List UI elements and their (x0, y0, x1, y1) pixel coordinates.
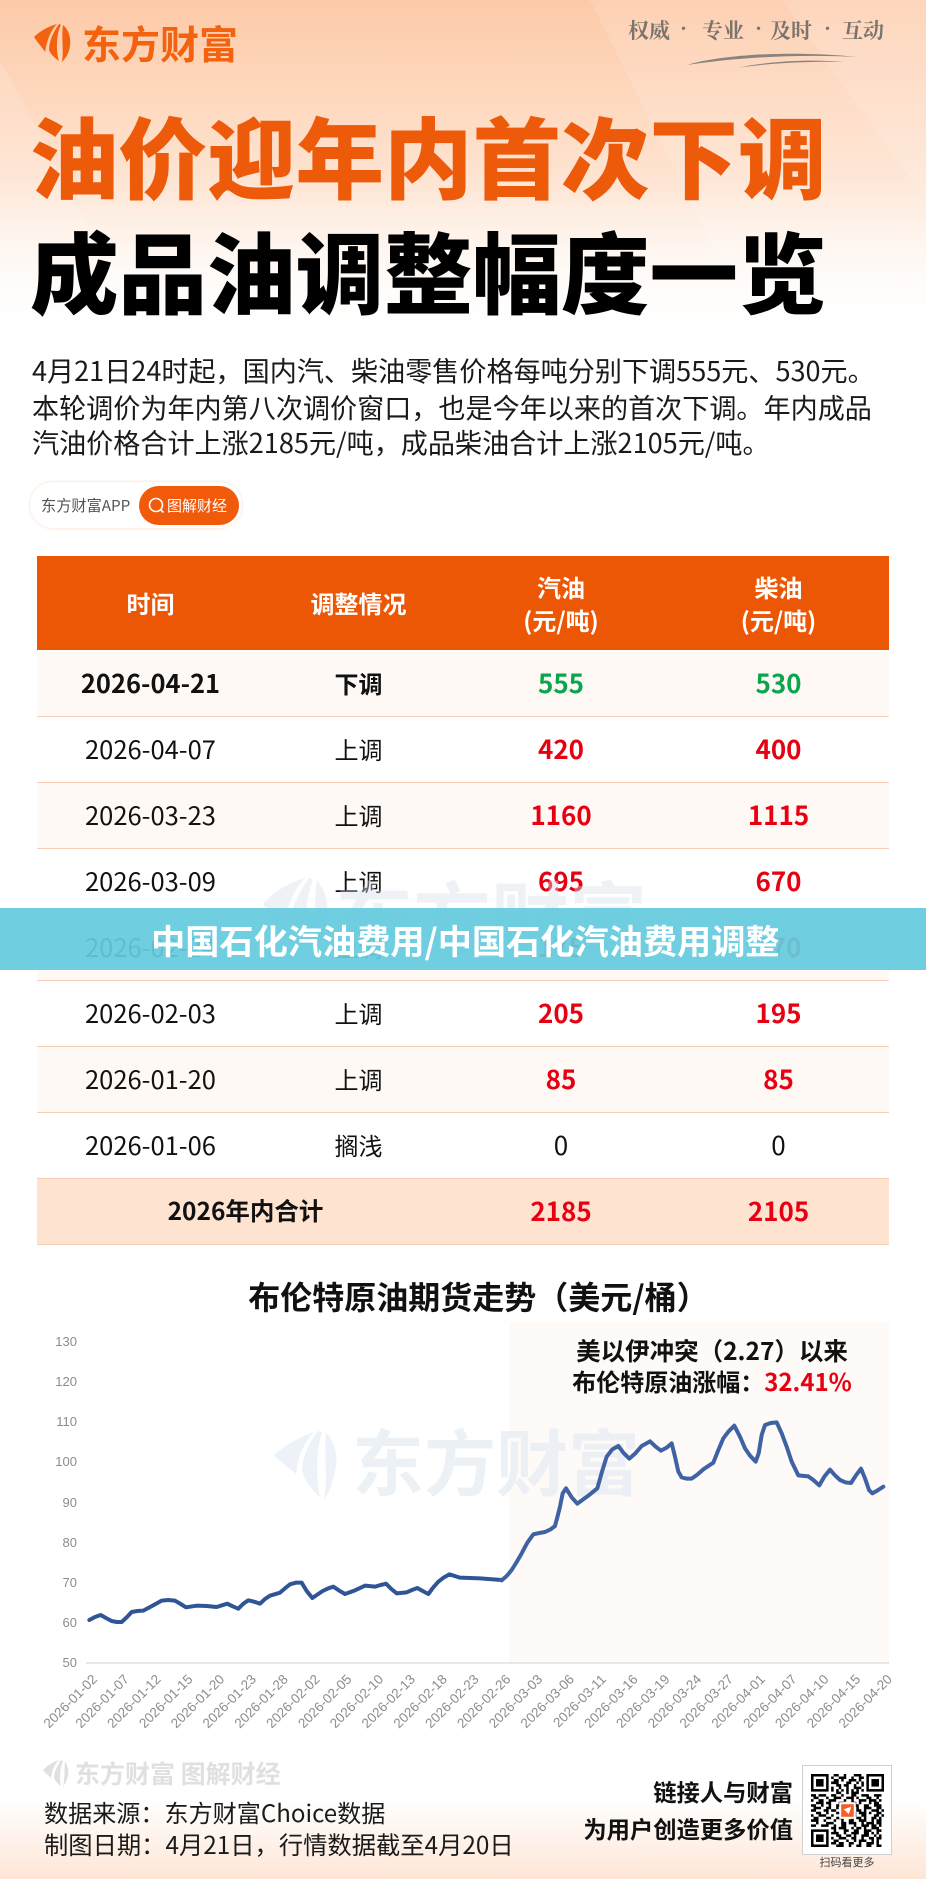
row 2026-03-09: 2026-03-09 (85, 862, 216, 899)
callout: since conflict: 布伦特原油涨幅：32.41% (572, 1363, 852, 1398)
y axis labels: 120 (55, 1374, 77, 1389)
row total: 2026年内合计 (168, 1193, 323, 1228)
row 2026-03-09: 上调 (334, 863, 382, 898)
x axis labels: 2026-04-01 (708, 1672, 768, 1731)
x axis labels: 2026-03-24 (645, 1671, 705, 1731)
row 2026-03-09 (37, 849, 889, 915)
x axis labels: 2026-03-11 (550, 1672, 609, 1730)
row 2026-02-03 (37, 981, 889, 1047)
header: gasoline: 汽油 (537, 569, 585, 604)
row 2026-04-07 (37, 717, 889, 783)
row 2026-01-20: 2026-01-20 (85, 1060, 216, 1097)
icon: flame logo (34, 24, 70, 62)
header: gasoline (523, 569, 599, 637)
row total: 2105 (748, 1192, 809, 1229)
row 2026-01-20: 85 (763, 1060, 794, 1097)
y axis labels: 60 (63, 1615, 77, 1630)
row 2026-04-21 (37, 651, 889, 717)
x axis labels: 2026-04-10 (772, 1672, 832, 1731)
x axis labels: 2026-02-02 (263, 1672, 323, 1731)
summary text block (32, 350, 875, 461)
row 2026-03-23: 2026-03-23 (85, 796, 216, 833)
x axis labels: 2026-04-20 (836, 1672, 895, 1731)
row 2026-04-21: 下调 (334, 665, 382, 700)
title line 2: 成品油调整幅度一览 (30, 205, 827, 333)
chart date: 制图日期：4月21日，行情数据截至4月20日 (44, 1826, 514, 1861)
row 2026-01-20: 上调 (334, 1061, 382, 1096)
table header (37, 556, 889, 650)
row 2026-04-21: 530 (755, 664, 802, 701)
tagline: 链接人与财富 (653, 1774, 793, 1808)
summary line 3: 汽油价格合计上涨2185元/吨，成品柴油合计上涨2105元/吨。 (32, 422, 770, 461)
row 2026-01-06: 0 (771, 1126, 786, 1163)
pill button text: 图解财经 (167, 495, 227, 516)
row total: 2185 (530, 1192, 592, 1229)
chart watermark: 东方财富 (352, 1406, 640, 1511)
row 2026-03-09: 695 (538, 862, 584, 899)
teal overlay banner (0, 908, 926, 970)
watermark over table (263, 858, 647, 970)
row 2026-02-24: 175 (538, 928, 584, 965)
footer brand watermark (43, 1755, 281, 1791)
header: diesel (741, 569, 816, 637)
row 2026-02-03: 2026-02-03 (85, 994, 216, 1031)
x axis labels: 2026-02-13 (359, 1672, 418, 1731)
row 2026-01-20 (37, 1047, 889, 1113)
x axis labels: 2026-01-12 (104, 1672, 164, 1731)
row 2026-01-06: 搁浅 (334, 1127, 382, 1162)
x axis labels: 2026-01-20 (168, 1672, 227, 1731)
summary line 2: 本轮调价为年内第八次调价窗口，也是今年以来的首次下调。年内成品 (32, 387, 872, 426)
row 2026-04-21: 2026-04-21 (81, 664, 220, 701)
header: diesel: 柴油 (754, 569, 802, 604)
x axis labels: 2026-03-03 (486, 1672, 545, 1731)
x axis (86, 1662, 889, 1664)
callout: since conflict (572, 1333, 852, 1398)
x axis labels: 2026-01-07 (72, 1672, 132, 1731)
logo: East Money (34, 15, 238, 71)
row 2026-04-07: 上调 (334, 731, 382, 766)
footer brand text: 东方财富 图解财经 (75, 1755, 281, 1791)
icon: search (148, 498, 164, 514)
row 2026-04-21: 555 (538, 664, 584, 701)
slogan top right: · (680, 13, 687, 43)
slogan top right (628, 13, 884, 68)
row 2026-01-20: 85 (546, 1060, 576, 1097)
row 2026-01-06 (37, 1113, 889, 1179)
slogan top right: 互动 (842, 15, 884, 45)
row 2026-02-24 (37, 915, 889, 981)
y axis labels: 90 (63, 1495, 77, 1510)
x axis labels: 2026-03-27 (677, 1672, 736, 1731)
data source: 数据来源：东方财富Choice数据 (44, 1794, 385, 1829)
logo wordmark: 东方财富 (82, 15, 238, 71)
header: date: 时间 (126, 585, 174, 620)
x axis labels: 2026-03-06 (518, 1672, 577, 1731)
watermark flame (263, 878, 328, 908)
banner text: 中国石化汽油费用/中国石化汽油费用调整 (151, 914, 780, 964)
x axis labels: 2026-02-26 (454, 1672, 514, 1731)
row 2026-04-07: 2026-04-07 (85, 730, 216, 767)
row 2026-01-06: 2026-01-06 (85, 1126, 216, 1163)
watermark wordmark: 东方财富 (335, 858, 647, 970)
row 2026-02-03: 上调 (334, 995, 382, 1030)
row 2026-02-03: 195 (755, 994, 802, 1031)
x axis labels: 2026-01-23 (200, 1672, 259, 1731)
row 2026-02-24: 2026-02-24 (85, 928, 216, 965)
brent price line (89, 1422, 883, 1622)
header: gasoline: (元/吨) (523, 602, 599, 637)
x axis labels: 2026-01-15 (136, 1672, 196, 1731)
x axis labels: 2026-01-28 (231, 1672, 291, 1731)
pill button (139, 486, 239, 525)
QR code (802, 1765, 892, 1855)
y axis labels: 110 (56, 1414, 77, 1429)
tagline (583, 1774, 793, 1845)
pill label: 东方财富APP (41, 494, 130, 516)
slogan top right: · (824, 13, 831, 43)
callout: since conflict: 美以伊冲突（2.27）以来 (576, 1333, 848, 1368)
row 2026-01-06: 0 (554, 1126, 568, 1163)
line chart (41, 1333, 895, 1731)
slogan top right: · (755, 13, 762, 43)
x axis labels: 2026-02-05 (295, 1672, 355, 1731)
slogan top right: 及时 (770, 15, 812, 45)
x axis labels (41, 1671, 895, 1731)
y axis labels: 100 (55, 1454, 77, 1469)
x axis labels: 2026-01-02 (41, 1672, 100, 1731)
x axis labels: 2026-02-23 (422, 1672, 482, 1731)
y axis labels (55, 1334, 77, 1670)
header: adjustment: 调整情况 (310, 585, 406, 620)
row total (37, 1179, 889, 1245)
tagline: 为用户创造更多价值 (583, 1811, 793, 1845)
slogan top right: 专业 (702, 15, 744, 45)
summary line 1: 4月21日24时起，国内汽、柴油零售价格每吨分别下调555元、530元。 (32, 350, 875, 389)
x axis labels: 2026-03-16 (581, 1672, 641, 1731)
y axis labels: 130 (55, 1334, 77, 1349)
y axis labels: 80 (63, 1535, 77, 1550)
x axis labels: 2026-04-15 (804, 1672, 863, 1731)
chart heading: 布伦特原油期货走势（美元/桶） (248, 1273, 709, 1319)
row 2026-04-07: 400 (755, 730, 802, 767)
x axis labels: 2026-02-18 (390, 1672, 450, 1731)
row 2026-03-09: 670 (755, 862, 802, 899)
row 2026-02-24: 170 (755, 928, 802, 965)
x axis labels: 2026-04-07 (740, 1672, 800, 1731)
highlighted period shading (509, 1322, 889, 1663)
QR caption: 扫码看更多 (820, 1854, 874, 1870)
row 2026-03-23: 上调 (334, 797, 382, 832)
icon: grey flame (43, 1760, 68, 1786)
title line 1: 油价迎年内首次下调 (30, 90, 827, 218)
row 2026-04-07: 420 (538, 730, 584, 767)
pill badge (30, 482, 242, 528)
table panel (37, 556, 889, 1245)
x axis labels: 2026-03-19 (613, 1672, 673, 1731)
y axis labels: 70 (63, 1575, 77, 1590)
x axis labels: 2026-02-10 (327, 1672, 386, 1731)
row 2026-03-23: 1160 (530, 796, 592, 833)
slogan top right: 权威 (628, 15, 670, 45)
row 2026-03-23: 1115 (748, 796, 809, 833)
row 2026-02-24: 上调 (334, 929, 382, 964)
y axis labels: 50 (63, 1655, 77, 1670)
row 2026-03-23 (37, 783, 889, 849)
header: diesel: (元/吨) (741, 602, 816, 637)
row 2026-02-03: 205 (538, 994, 584, 1031)
